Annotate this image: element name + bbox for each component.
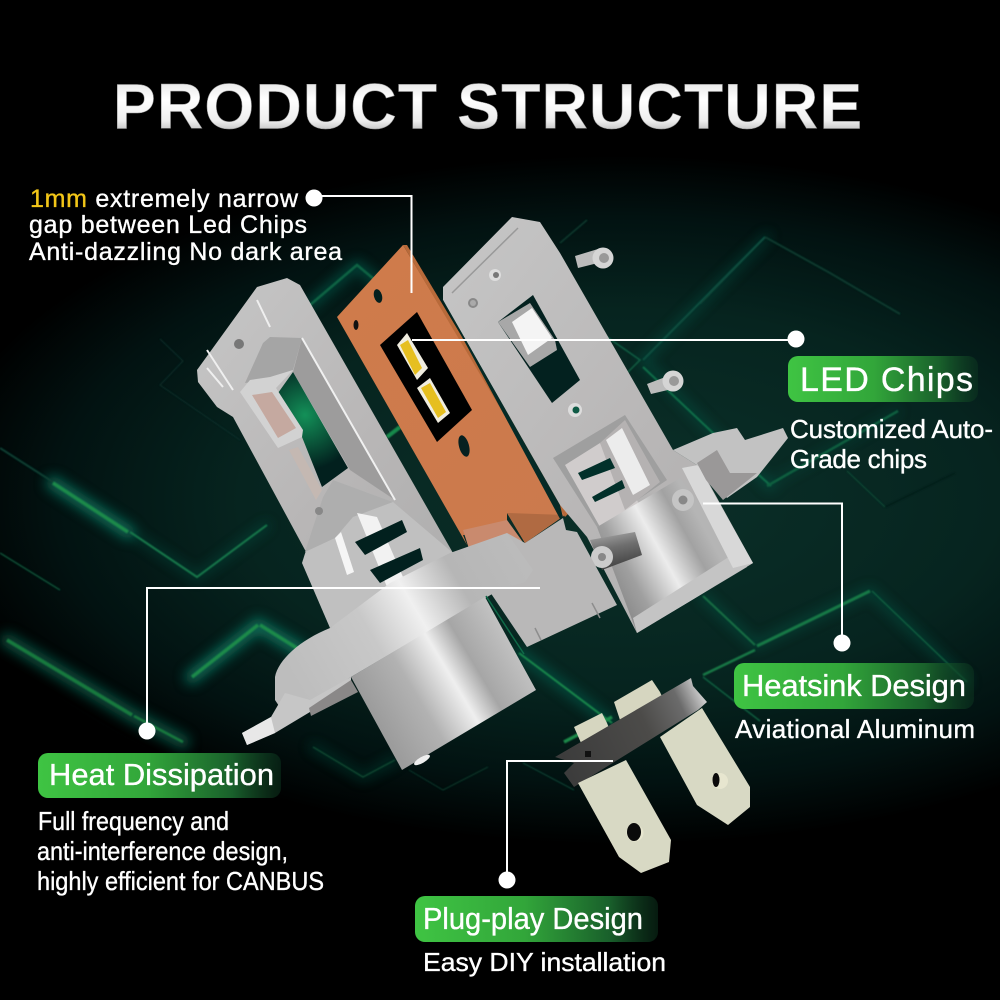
left housing with slots xyxy=(302,480,453,628)
plug connector xyxy=(555,678,750,873)
callout: Heat Dissipation: Heat Dissipation xyxy=(49,757,274,792)
callout: Heatsink Design: Aviational Aluminum xyxy=(735,714,975,744)
callout: Heat Dissipation: Full frequency and xyxy=(38,806,229,836)
LED chip 1 xyxy=(397,333,428,380)
callout: 1mm narrow gap: gap between Led Chips xyxy=(29,211,307,239)
callout: Plug-play Design xyxy=(415,896,666,977)
bulb cylinder xyxy=(351,596,536,770)
right blade xyxy=(660,708,750,825)
bulb cylinder right half xyxy=(597,478,747,633)
callout: Plug-play Design: Easy DIY installation xyxy=(423,947,666,977)
top terminals xyxy=(574,680,668,752)
screw top xyxy=(575,248,614,268)
callout: Heatsink Design xyxy=(734,663,975,744)
leader dots xyxy=(138,190,850,888)
center base block xyxy=(490,518,617,647)
locating tab xyxy=(242,677,351,745)
callout: LED Chips: LED Chips xyxy=(800,361,973,399)
callout: Plug-play Design: Plug-play Design xyxy=(423,901,643,936)
callout: LED Chips: Grade chips xyxy=(790,444,927,474)
right heat-sink bracket xyxy=(440,217,788,633)
callout: 1mm narrow gap: 1mm extremely narrow xyxy=(30,185,299,213)
fixing post xyxy=(590,532,642,570)
screw bottom xyxy=(647,370,684,394)
callout: 1mm narrow gap: Anti-dazzling No dark area xyxy=(29,238,342,266)
callout: Heatsink Design: Heatsink Design xyxy=(742,668,966,703)
left heat-sink bracket xyxy=(197,278,453,590)
right flange xyxy=(673,428,788,498)
black LED substrate xyxy=(380,312,472,442)
flange disc xyxy=(242,533,533,745)
leader lines xyxy=(147,196,842,880)
LED chip 2 xyxy=(417,378,450,423)
callout: LED Chips: Customized Auto- xyxy=(790,414,993,444)
callout: Heat Dissipation xyxy=(37,753,324,896)
callout: 1mm narrow gap xyxy=(29,185,342,266)
callout: LED Chips xyxy=(788,356,993,474)
callout: Heat Dissipation: highly efficient for CANBUS xyxy=(37,866,324,896)
callout: Heat Dissipation: anti-interference design, xyxy=(37,836,288,866)
left blade xyxy=(578,760,671,873)
title: PRODUCT STRUCTURE xyxy=(113,70,862,142)
copper circuit board xyxy=(337,245,568,552)
